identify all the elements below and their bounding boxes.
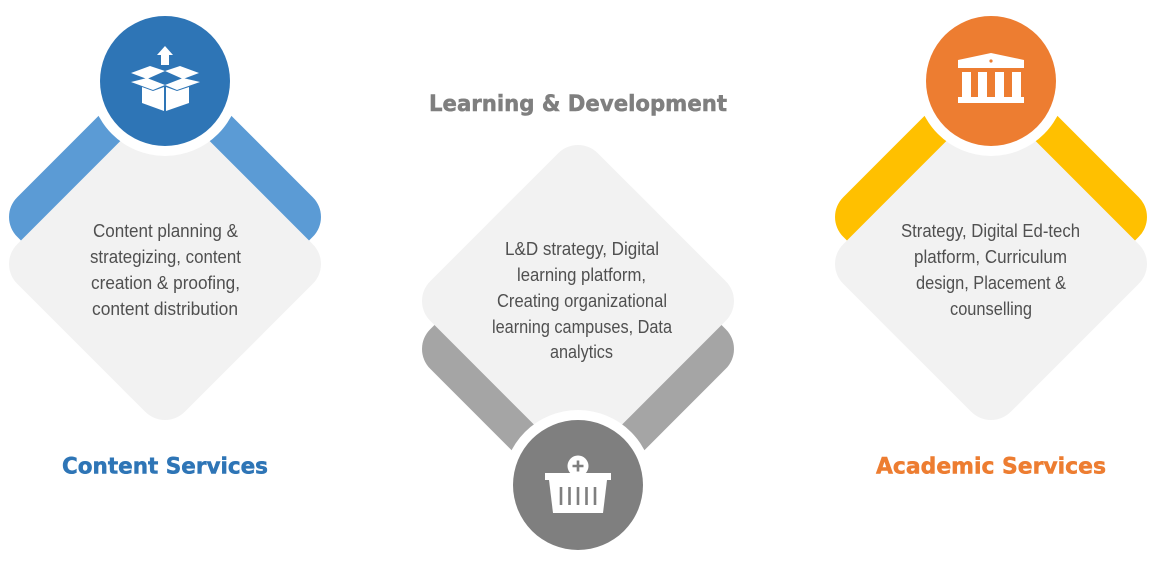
heading: learning and development: Learning & Development [429,92,727,117]
panel: academic services [823,6,1159,480]
orange circle [926,16,1056,146]
blue circle [100,16,230,146]
text: content description: Content planning & [93,221,238,241]
text: learning description: Creating organizational [497,291,667,311]
text: content description: strategizing, content [90,247,241,267]
grey content diamond [0,96,333,432]
text: learning description [492,239,673,362]
text: content description: content distribution [92,299,238,319]
dark grey circle [513,420,643,550]
icon: open box with arrow [131,46,200,111]
grey content diamond [823,96,1159,432]
text: academic description [901,221,1080,319]
text: learning description: learning campuses, Data [492,317,673,337]
panel: learning and development [410,92,746,560]
text: learning description: learning platform, [517,265,646,285]
icon: basket with plus [545,456,611,513]
text: academic description: Strategy, Digital Ed-tech [901,221,1080,241]
white ring [90,6,240,156]
text: academic description: design, Placement & [916,273,1066,293]
blue band diamond [0,49,333,385]
text: learning description: analytics [550,342,613,362]
grey band diamond [410,181,746,517]
text: academic description: platform, Curriculum [914,247,1067,267]
text: academic description: counselling [950,299,1032,319]
white ring [916,6,1066,156]
icon: institution building [958,53,1024,103]
yellow band diamond [823,49,1159,385]
panel: content services [0,6,333,480]
text: learning description: L&D strategy, Digital [505,239,659,259]
white ring [503,410,653,560]
text: content description [90,221,241,319]
text: content description: creation & proofing, [91,273,240,293]
heading: content services: Content Services [62,454,268,480]
heading: academic services: Academic Services [876,454,1106,480]
grey content diamond [410,133,746,469]
